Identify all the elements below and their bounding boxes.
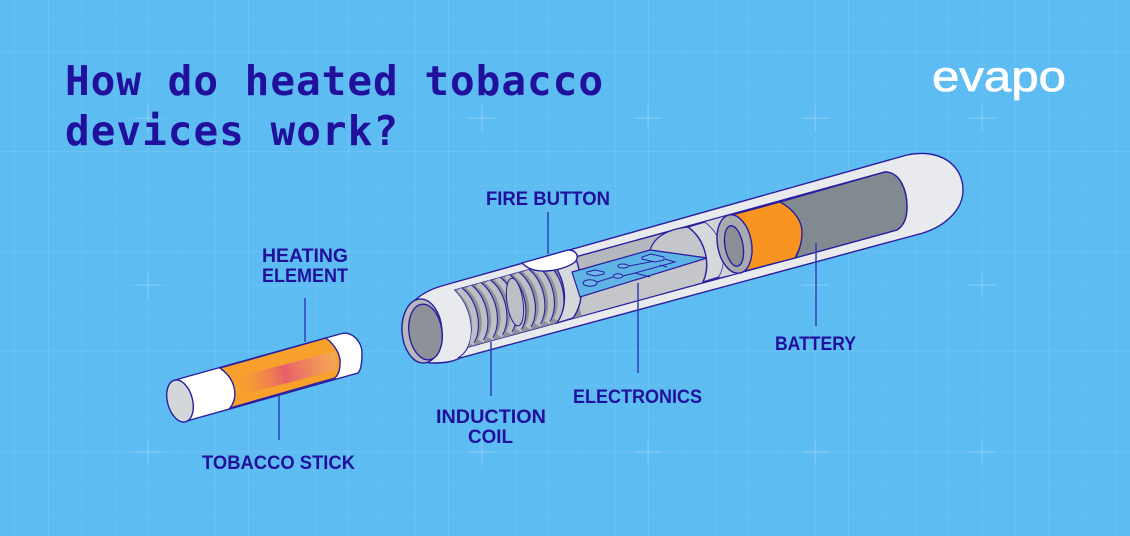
label: fire button: FIRE BUTTON <box>486 189 610 210</box>
label: induction coil <box>436 407 546 448</box>
label: tobacco stick: TOBACCO STICK <box>202 453 355 474</box>
lower interior <box>573 258 707 318</box>
label: heating element <box>262 246 348 287</box>
mouth opening <box>400 298 446 364</box>
logo: evapo: evapo <box>932 53 1066 101</box>
electronics board <box>572 250 707 297</box>
tobacco stick illustration <box>162 333 362 425</box>
title: How do heated tobacco <box>65 57 603 105</box>
label: battery: BATTERY <box>775 334 856 355</box>
heat glow <box>234 351 337 397</box>
label: heating element: HEATING <box>262 246 348 267</box>
leader: fire button <box>547 212 549 254</box>
spacer behind battery <box>705 215 745 277</box>
battery terminal ring <box>713 212 756 276</box>
stick body <box>175 333 362 422</box>
battery body <box>780 172 907 258</box>
label: electronics: ELECTRONICS <box>573 387 702 408</box>
cap edge <box>458 347 468 358</box>
label: induction coil: INDUCTION <box>436 407 546 428</box>
leader: heating element <box>304 298 306 342</box>
leader: tobacco stick <box>278 396 280 440</box>
device shell <box>403 153 963 363</box>
induction coil <box>455 270 582 347</box>
collar <box>552 256 582 323</box>
heated orange section <box>220 338 340 408</box>
battery orange band <box>732 202 802 271</box>
label: induction coil: COIL <box>468 427 513 448</box>
leader: electronics <box>637 283 639 373</box>
leader: induction coil <box>490 342 492 396</box>
fire button <box>522 250 577 271</box>
inner arch <box>650 227 707 258</box>
title: devices work? <box>65 107 398 155</box>
device illustration <box>400 153 963 364</box>
interior window <box>455 172 907 347</box>
label: heating element: ELEMENT <box>262 266 348 287</box>
leader: battery <box>815 243 817 326</box>
stick end <box>162 377 198 425</box>
rear collar <box>688 222 724 282</box>
